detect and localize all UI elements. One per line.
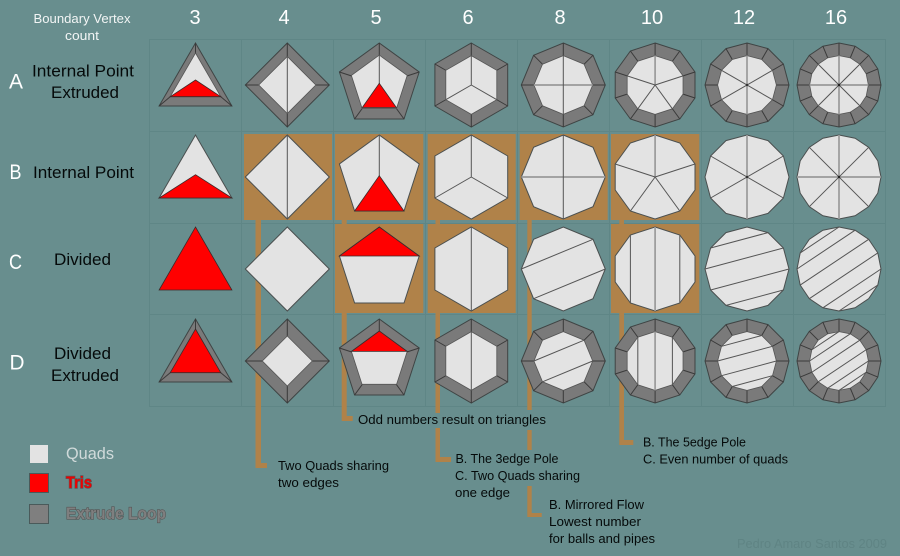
callout: 5edge pole: B. The 5edge Pole	[643, 436, 746, 450]
legend: quads: Quads	[66, 445, 114, 463]
row labels: A	[9, 70, 23, 94]
column headers: 12	[733, 7, 755, 29]
callout: 3edge pole	[455, 452, 580, 500]
D10 decagon	[615, 319, 695, 403]
connector: column 10 callout	[619, 220, 633, 445]
C16 hexadecagon	[797, 227, 881, 311]
author credit: Pedro Amaro Santos 2009	[737, 536, 887, 551]
callout: 3edge pole: B. The 3edge Pole	[456, 452, 559, 466]
callout: mirrored flow: B. Mirrored Flow	[549, 498, 645, 512]
C3 triangle	[159, 227, 232, 290]
header: boundary vertex count	[34, 12, 131, 43]
D5 pentagon	[339, 319, 419, 395]
A6 hexagon	[435, 43, 508, 127]
D8 octagon	[521, 319, 605, 403]
B4 diamond	[245, 135, 329, 219]
C8 octagon	[521, 227, 605, 311]
A8 octagon	[521, 43, 605, 127]
connector: column 6 callout	[436, 220, 451, 462]
connector: column 4 callout	[256, 220, 267, 468]
D12 dodecagon	[705, 319, 789, 403]
B3 triangle	[159, 135, 232, 198]
legend	[30, 445, 166, 524]
row labels: D	[10, 352, 24, 374]
callout: two quads sharing two edges	[278, 459, 389, 490]
B6 hexagon	[435, 135, 508, 219]
connector: column 8 callout	[527, 220, 542, 517]
A10 decagon	[615, 43, 695, 127]
column headers	[189, 7, 847, 29]
D6 hexagon	[435, 319, 508, 403]
callout: 3edge pole: C. Two Quads sharing	[455, 469, 580, 483]
callout: two quads sharing two edges: two edges	[278, 476, 339, 490]
A3 triangle	[159, 43, 232, 106]
D4 diamond	[245, 319, 329, 403]
callout: odd numbers: Odd numbers result on triangles	[358, 413, 546, 427]
A12 dodecagon	[705, 43, 789, 127]
callout: 5edge pole	[643, 436, 788, 466]
connector: column 5 callout	[342, 220, 353, 421]
B8 octagon	[521, 135, 605, 219]
column headers: 4	[278, 7, 290, 29]
C4 diamond	[245, 227, 329, 311]
row B: internal point	[159, 135, 881, 219]
row labels	[9, 62, 134, 385]
A5 pentagon	[339, 43, 419, 119]
D3 triangle	[159, 319, 232, 382]
row labels: Internal Point	[32, 62, 134, 80]
column headers: 8	[554, 7, 566, 29]
row A: internal point extruded	[159, 43, 881, 127]
orange highlight cells	[244, 134, 699, 313]
column headers: 5	[370, 7, 382, 29]
callout: mirrored flow: Lowest number	[549, 515, 641, 529]
table grid	[149, 39, 886, 406]
callout: mirrored flow	[549, 498, 655, 546]
column headers: 10	[641, 7, 663, 29]
row labels: C	[9, 251, 22, 274]
row labels: Extruded	[51, 367, 119, 385]
row labels: Divided	[54, 345, 111, 363]
header: boundary vertex count: Boundary Vertex	[34, 12, 131, 26]
column headers: 3	[189, 7, 201, 29]
legend: tris: Tris	[66, 474, 92, 492]
callout: 3edge pole: one edge	[455, 486, 510, 500]
B16 hexadecagon	[797, 135, 881, 219]
row labels: Divided	[54, 251, 111, 269]
header: boundary vertex count: count	[65, 29, 100, 43]
legend: extrude loop: Extrude Loop	[66, 505, 166, 523]
callout: mirrored flow: for balls and pipes	[549, 532, 655, 546]
row labels: B	[10, 161, 22, 184]
C6 hexagon	[435, 227, 508, 311]
D16 hexadecagon	[797, 319, 881, 403]
row labels: Internal Point	[33, 164, 134, 182]
row D: divided extruded	[159, 319, 881, 403]
B5 pentagon	[339, 135, 419, 211]
B12 dodecagon	[705, 135, 789, 219]
column headers: 6	[462, 7, 474, 29]
column headers: 16	[825, 7, 847, 29]
callout: 5edge pole: C. Even number of quads	[643, 452, 788, 466]
A16 hexadecagon	[797, 43, 881, 127]
callout: two quads sharing two edges: Two Quads sharing	[278, 459, 389, 473]
C5 pentagon	[339, 227, 419, 303]
B10 decagon	[615, 135, 695, 219]
C12 dodecagon	[705, 227, 789, 311]
C10 decagon	[615, 227, 695, 311]
A4 diamond	[245, 43, 329, 127]
row labels: Extruded	[51, 84, 119, 102]
row C: divided	[159, 227, 881, 311]
